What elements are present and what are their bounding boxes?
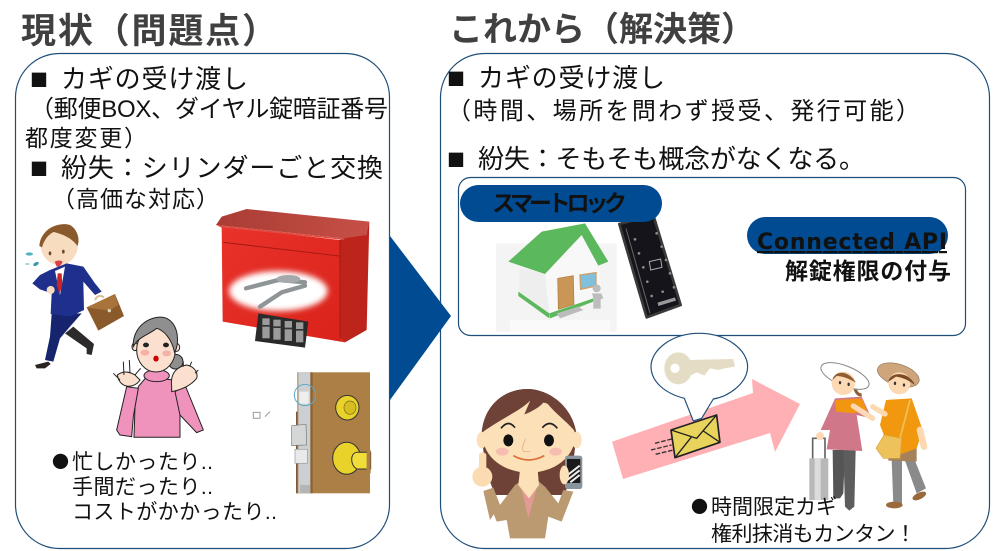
illustration: two travellers bbox=[809, 357, 927, 511]
text block: current state problems: （郵便BOX、ダイヤル錠暗証番号 bbox=[30, 96, 388, 123]
text block: future summary bbox=[691, 493, 916, 546]
text block: current state summary: 手間だったり.. bbox=[72, 476, 213, 499]
text block: current state summary: 忙しかったり.. bbox=[72, 451, 213, 474]
text block: future summary: 権利抹消もカンタン！ bbox=[711, 523, 916, 546]
text block: future summary: 時間限定カギ bbox=[711, 496, 837, 519]
text block: current state problems: （高価な対応） bbox=[52, 186, 219, 212]
text block: current state problems: カギの受け渡し bbox=[61, 64, 248, 94]
text block: future benefits: 紛失：そもそも概念がなくなる。 bbox=[478, 144, 865, 174]
text block: future benefits: （時間、場所を問わず授受、発行可能） bbox=[447, 98, 920, 125]
text block: current state problems: 都度変更） bbox=[25, 125, 147, 151]
heading: current state: 現状（問題点） bbox=[21, 12, 277, 51]
callout: key bubble bbox=[651, 333, 748, 421]
label pill: smart lock: スマートロック bbox=[492, 190, 627, 216]
illustration: hurrying businessman bbox=[25, 224, 124, 368]
heading: future: これから（解決策） bbox=[449, 11, 755, 49]
panel: smart lock and API bbox=[458, 178, 966, 336]
text block: current state summary: ● bbox=[52, 448, 69, 473]
text block: current state problems: 紛失：シリンダーごと交換 bbox=[61, 153, 383, 183]
text: unlock permission: 解錠権限の付与 bbox=[785, 258, 951, 284]
icon: envelope bbox=[651, 415, 720, 458]
text block: future benefits: ■ bbox=[447, 147, 465, 173]
text block: future benefits: カギの受け渡し bbox=[478, 63, 665, 93]
text block: future benefits: ■ bbox=[447, 66, 465, 92]
label pill: smart lock bbox=[460, 185, 662, 222]
text block: future benefits bbox=[447, 63, 920, 174]
illustration: woman with smartphone bbox=[472, 389, 582, 538]
text block: current state problems: ■ bbox=[30, 156, 48, 182]
panel: current state bbox=[16, 54, 390, 548]
panel: future bbox=[440, 54, 990, 548]
arrow: pink delivery arrow bbox=[612, 379, 800, 479]
text block: current state summary: コストがかかったり.. bbox=[72, 501, 277, 524]
text block: future summary: ● bbox=[691, 493, 708, 518]
icon: red mailbox with keys and dial lock bbox=[216, 209, 369, 348]
illustration: house bbox=[496, 223, 617, 332]
illustration: worried elderly woman bbox=[113, 317, 203, 437]
illustration: door lock cylinder bbox=[253, 372, 371, 493]
text block: current state problems bbox=[25, 64, 388, 212]
illustration: smart lock device bbox=[619, 215, 681, 317]
label pill: Connected API bbox=[747, 217, 948, 255]
label pill: Connected API: Connected API bbox=[757, 230, 947, 255]
arrow: transition bbox=[390, 236, 451, 400]
text block: current state problems: ■ bbox=[30, 67, 48, 93]
text block: current state summary bbox=[52, 448, 277, 524]
